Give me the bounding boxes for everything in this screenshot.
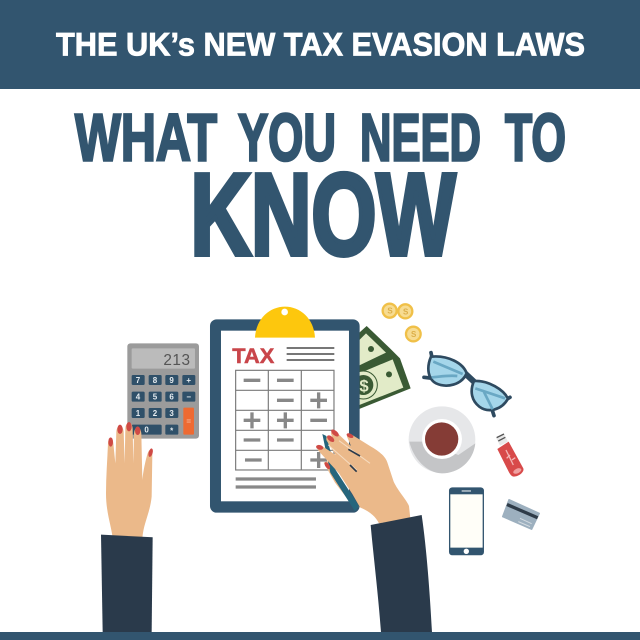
left nails [108,422,154,457]
icon: calculator: − [186,393,191,402]
clipboard with tax form [210,307,360,513]
header band [0,0,640,89]
right hand [317,431,410,523]
icon: coins [383,304,421,341]
left hand [106,423,152,539]
icon: calculator: * [170,426,174,435]
right arm [316,428,410,523]
icon: banknotes: $ [359,376,369,395]
thumb [324,461,360,508]
icon: calculator: = [186,417,191,426]
form lines [287,348,334,360]
form footer lines [236,479,316,487]
icon: calculator: 7 [136,376,141,385]
header title: THE UK’s NEW TAX EVASION LAWS [56,26,585,62]
icon: calculator: 2 [153,409,158,418]
icon: calculator: 4 [136,393,141,402]
icon: calculator: 8 [153,376,158,385]
clipboard clip [255,307,315,338]
icon: calculator: 1 [136,409,141,418]
left arm [101,422,154,632]
icon: calculator: 6 [169,393,174,402]
icon: calculator [127,343,199,439]
main heading line 1: YOU [238,100,336,176]
main heading line 2: KNOW [190,150,456,280]
main heading line 1 [75,100,566,176]
icon: credit card [503,500,539,529]
icon: coins: S [387,307,393,316]
icon: calculator: 9 [169,376,174,385]
icon: smartphone [449,487,484,555]
footer band [0,632,640,640]
main heading line 1: WHAT [75,100,217,176]
icon: coins: S [403,307,409,316]
icon: coffee cup [409,406,475,473]
icon: USB stick [496,434,523,477]
icon: calculator: 5 [153,393,158,402]
left sleeve [101,535,153,632]
TAX label: TAX [232,345,274,368]
finger highlights and creases [328,441,370,472]
icon: banknotes [349,326,411,410]
icon: glasses [424,353,510,416]
main heading line 1: NEED [360,100,481,176]
icon: calculator: 0 [144,426,149,435]
icon: calculator: 3 [169,409,174,418]
pen [322,434,359,511]
main heading line 1: TO [505,100,566,176]
icon: calculator: + [186,376,191,385]
right nails [316,428,354,470]
tax table [236,370,334,470]
icon: calculator: 213 [163,352,190,369]
icon: coins: S [411,330,417,339]
right sleeve [371,515,432,632]
